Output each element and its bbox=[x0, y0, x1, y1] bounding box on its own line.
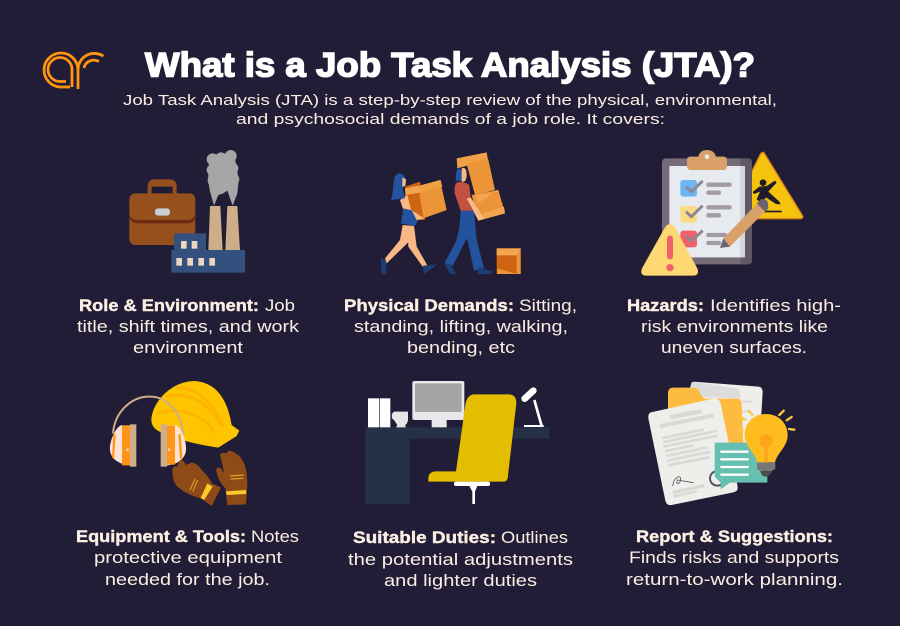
icon: protective equipment bbox=[110, 381, 247, 506]
text: suitable duties: the potential adjustments bbox=[348, 551, 573, 569]
intro text: Job Task Analysis (JTA) is a step-by-step review of the physical, environmental, bbox=[123, 93, 777, 109]
text: equipment and tools: Notes bbox=[251, 528, 299, 546]
text: physical demands: bending, etc bbox=[407, 339, 515, 357]
icon: people carrying boxes bbox=[381, 152, 521, 274]
text: role and environment: environment bbox=[133, 339, 243, 357]
text: suitable duties: and lighter duties bbox=[384, 572, 537, 590]
text: report and suggestions bbox=[626, 528, 843, 589]
text: suitable duties bbox=[348, 529, 573, 590]
icon: report and idea bbox=[648, 382, 794, 505]
text: suitable duties: Outlines bbox=[501, 529, 568, 547]
icon: briefcase and factory bbox=[129, 150, 245, 273]
intro text bbox=[123, 93, 777, 128]
text: equipment and tools: protective equipment bbox=[94, 549, 282, 567]
text: role and environment bbox=[77, 297, 300, 357]
logo bbox=[44, 53, 104, 89]
text: equipment and tools: Equipment & Tools: bbox=[76, 528, 246, 546]
text: hazards: Identifies high- bbox=[710, 297, 841, 315]
text: physical demands bbox=[344, 297, 577, 357]
text: equipment and tools: needed for the job. bbox=[105, 571, 270, 589]
text: physical demands: standing, lifting, walking, bbox=[354, 318, 568, 336]
text: equipment and tools bbox=[76, 528, 299, 589]
text: hazards: risk environments like bbox=[641, 318, 828, 336]
text: role and environment: Role & Environment: bbox=[79, 297, 259, 315]
text: role and environment: title, shift times, and work bbox=[77, 318, 300, 336]
text: hazards: Hazards: bbox=[627, 297, 704, 315]
text: suitable duties: Suitable Duties: bbox=[353, 529, 496, 547]
title: What is a Job Task Analysis (JTA)? bbox=[145, 46, 755, 84]
text: hazards: uneven surfaces. bbox=[661, 339, 807, 357]
text: report and suggestions: Finds risks and supports bbox=[629, 549, 839, 567]
text: report and suggestions: return-to-work planning. bbox=[626, 571, 843, 589]
icon: desk and chair bbox=[365, 381, 549, 504]
text: physical demands: Sitting, bbox=[519, 297, 577, 315]
icon: hazard checklist bbox=[641, 150, 803, 276]
text: role and environment: Job bbox=[265, 297, 295, 315]
text: hazards bbox=[627, 297, 841, 357]
intro text: and psychosocial demands of a job role. It covers: bbox=[236, 112, 665, 128]
text: report and suggestions: Report & Suggestions: bbox=[636, 528, 833, 546]
text: physical demands: Physical Demands: bbox=[344, 297, 514, 315]
